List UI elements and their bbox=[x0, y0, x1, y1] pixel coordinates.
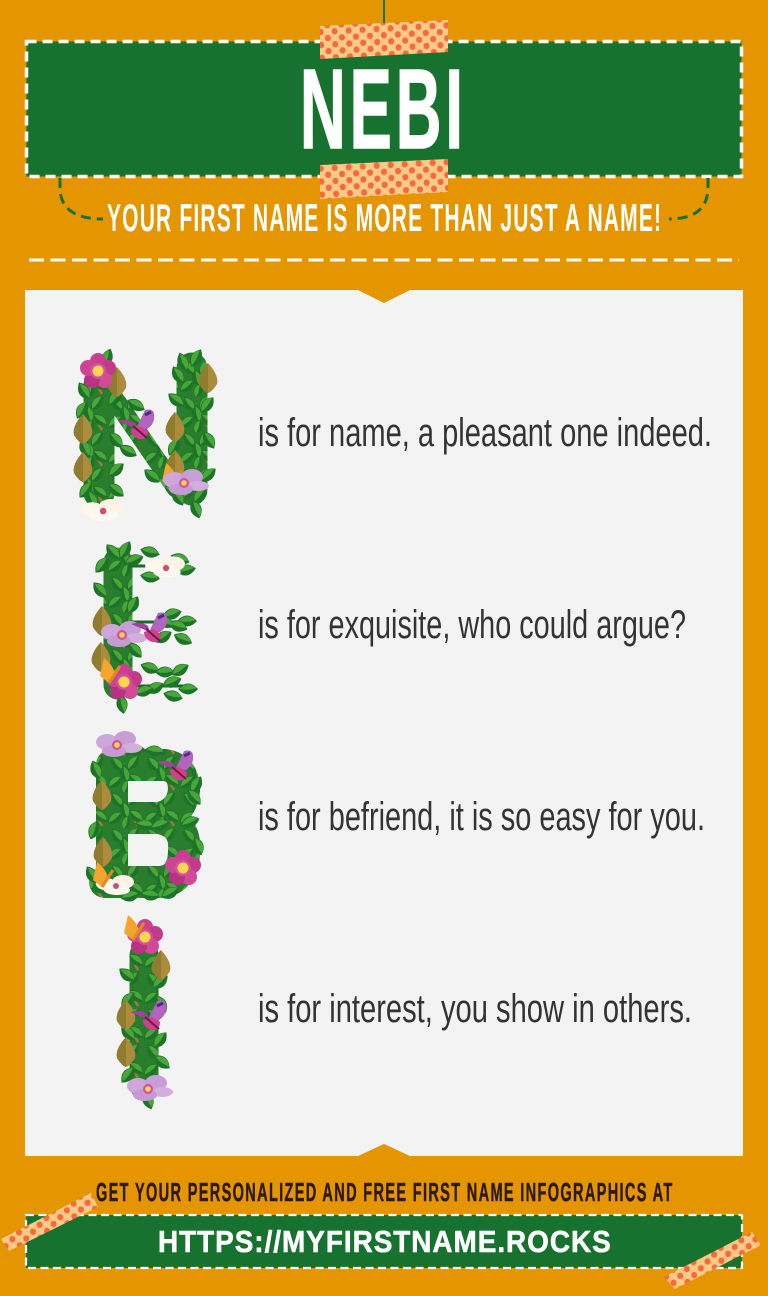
dashed divider bbox=[29, 258, 739, 262]
tape: footer right bbox=[664, 1232, 761, 1289]
butterfly: orange bbox=[162, 463, 182, 488]
letter E bbox=[89, 539, 198, 715]
butterfly: orange bbox=[124, 915, 144, 940]
dashed connector: right bbox=[669, 178, 708, 219]
dashed connector: left bbox=[60, 178, 103, 219]
flower: white bbox=[96, 875, 134, 895]
letter B bbox=[82, 731, 207, 903]
url banner bbox=[26, 1215, 742, 1268]
hanging line bbox=[383, 0, 385, 24]
subtitle: YOUR FIRST NAME IS MORE THAN JUST A NAME! bbox=[107, 196, 661, 240]
butterfly: purple bbox=[118, 410, 154, 439]
flower: white bbox=[145, 556, 185, 578]
title: name: NEBI bbox=[300, 47, 463, 173]
tape: footer left bbox=[1, 1193, 98, 1251]
letter I bbox=[116, 915, 173, 1111]
flower: white bbox=[81, 499, 123, 521]
tape: bottom bbox=[320, 159, 448, 199]
butterfly: orange bbox=[93, 862, 113, 887]
tape: top bbox=[320, 20, 448, 59]
flower: pink bbox=[165, 850, 201, 885]
flower: lilac bbox=[127, 1075, 173, 1101]
flower: pink bbox=[106, 664, 142, 699]
flower: pink bbox=[127, 919, 163, 954]
url text: HTTPS://MYFIRSTNAME.ROCKS bbox=[158, 1225, 611, 1259]
flower: pink bbox=[80, 353, 116, 388]
butterfly: purple bbox=[157, 751, 193, 780]
title banner bbox=[26, 20, 742, 199]
panel: paper bbox=[25, 290, 743, 1156]
flower: lilac bbox=[96, 731, 142, 757]
letter N bbox=[72, 347, 219, 521]
butterfly: purple bbox=[131, 613, 167, 642]
flower: lilac bbox=[101, 621, 147, 647]
butterfly: orange bbox=[100, 658, 120, 683]
flower: lilac bbox=[163, 469, 209, 495]
butterfly: purple bbox=[130, 1001, 166, 1030]
footer text: GET YOUR PERSONALIZED AND FREE FIRST NAME INFOGRAPHICS AT bbox=[96, 1179, 672, 1207]
